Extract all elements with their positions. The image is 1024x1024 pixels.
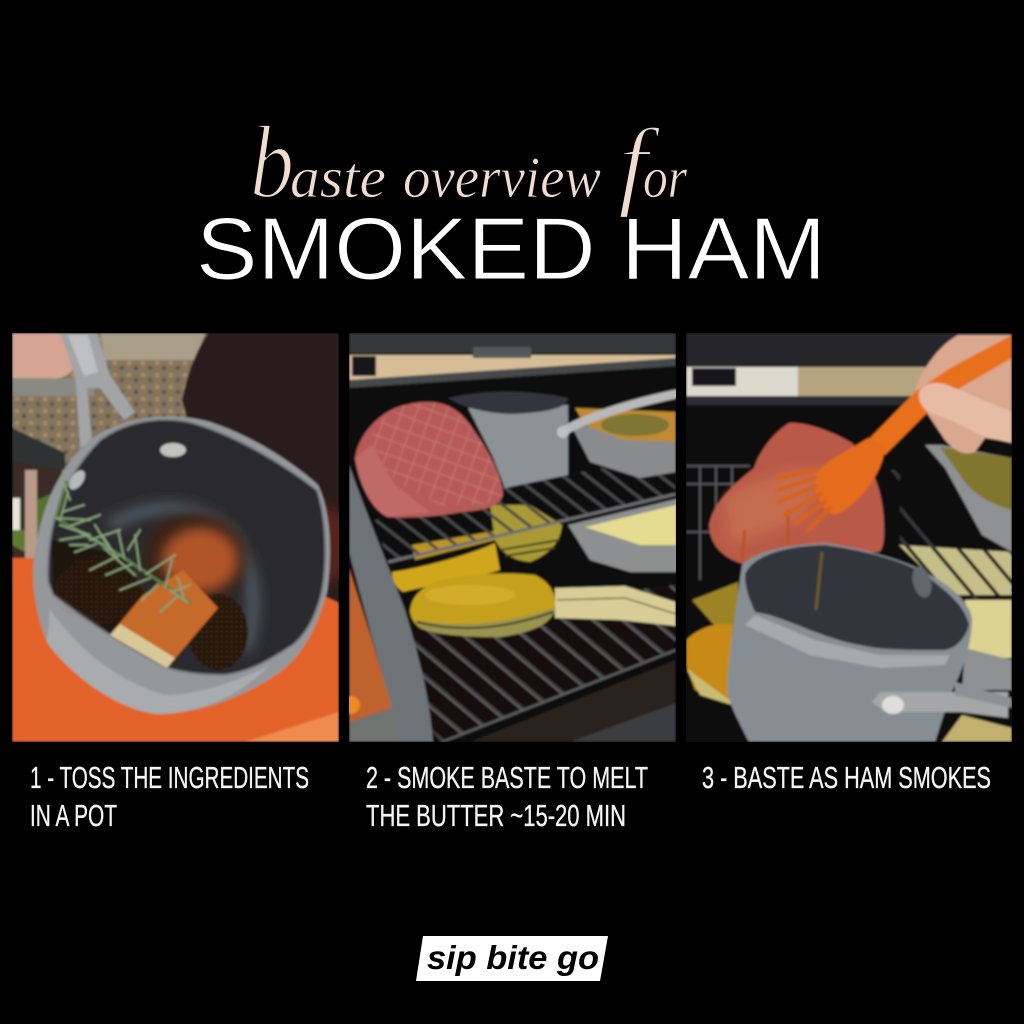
caption 2: 2 - SMOKE BASTE TO MELT: [366, 760, 648, 795]
caption 2: THE BUTTER ~15-20 MIN: [366, 798, 626, 833]
floor of smoker: [470, 660, 676, 742]
pot handle: [872, 682, 1012, 718]
delicata squash, far halves: [392, 505, 562, 592]
caption 1: 1 - TOSS THE INGREDIENTS: [30, 760, 309, 795]
squash, large front half: [410, 573, 555, 637]
caption 2: [366, 760, 648, 833]
script heading: baste overview for: f: [618, 108, 661, 219]
title: [196, 105, 826, 298]
caption 1: [30, 760, 309, 833]
hand: [12, 333, 74, 378]
panel: photo 2, pot on smoker with ham: [342, 333, 680, 742]
casserole tray: [571, 408, 676, 478]
rivets: [160, 443, 186, 457]
ham with glaze: [709, 423, 884, 565]
gravel background: [12, 333, 210, 474]
script heading: baste overview for: b: [250, 105, 294, 220]
script heading: baste overview for: overview: [403, 145, 601, 210]
squash, bottom right: [942, 715, 1012, 742]
pot in front: [727, 543, 972, 742]
pot handle: [60, 333, 135, 448]
butter trays: [899, 545, 1012, 690]
main heading: SMOKED HAM: SMOKED HAM: [196, 199, 826, 298]
orange smoker body: [349, 568, 392, 722]
logo: sip bite go: sip bite go: [427, 939, 599, 976]
upper grill grate: [374, 467, 676, 558]
spices in pot: [52, 513, 248, 670]
basting brush: [778, 335, 1012, 530]
pot interior: [48, 420, 325, 675]
squash halves, left: [686, 582, 738, 705]
casserole tray: [925, 445, 1012, 552]
left door frame: [349, 465, 433, 742]
panel: photo 3, basting the ham: [686, 333, 1012, 742]
smoker lid: [349, 333, 676, 353]
thumb: [919, 383, 1012, 443]
caption 1: IN A POT: [30, 798, 117, 833]
rosemary sprig: [56, 478, 190, 612]
script heading: baste overview for: aste: [290, 145, 386, 210]
lower grill grate: [408, 585, 676, 742]
smoker lid: [686, 333, 1012, 366]
metal pot: [448, 392, 676, 488]
dark grill lid: [182, 333, 339, 603]
ham: [355, 402, 503, 517]
foil tray with butter: [568, 498, 680, 572]
back grate: [686, 466, 750, 580]
orange table highlight: [245, 712, 339, 742]
script heading: baste overview for: [250, 105, 687, 220]
butter: [110, 570, 218, 668]
squash, pale stem end: [555, 586, 676, 626]
pot exterior: [33, 416, 330, 714]
panel: photo 1, ingredients in a pot: [12, 333, 365, 742]
hand, fingers: [915, 335, 1012, 454]
spice tin: [12, 428, 65, 558]
script heading: baste overview for: or: [643, 145, 687, 210]
